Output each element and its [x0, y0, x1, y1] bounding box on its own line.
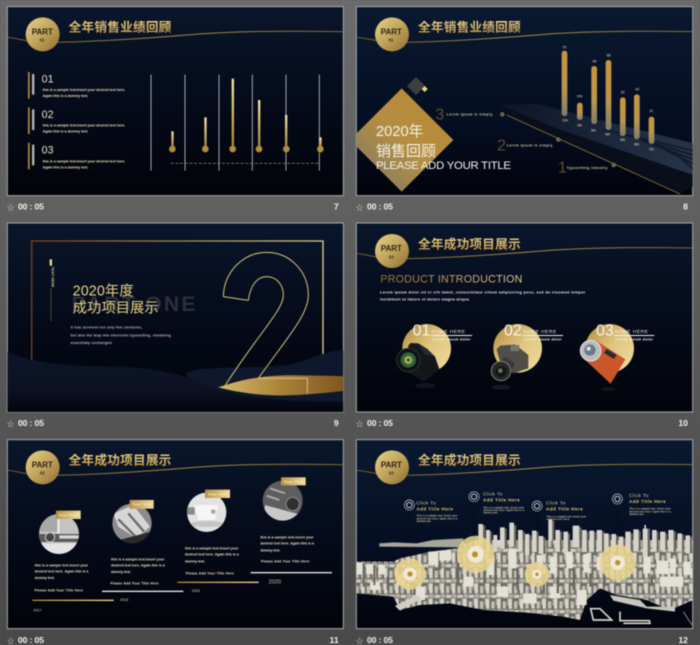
- slide 8 bar chart: 32: [621, 90, 625, 94]
- slide 10 footer: [356, 418, 688, 429]
- panel: slide 11 project timeline: [7, 440, 343, 645]
- slide 10 product 03: Lorem Ipsum dolor: [615, 338, 654, 342]
- slide 11 milestone 2018: Please Add Your Title Here: [110, 581, 159, 585]
- slide 7 list item 01: [28, 72, 125, 99]
- slide 12 footer: [356, 635, 688, 645]
- slide 8 footer: ☆: [356, 203, 364, 212]
- slide 8 small diamonds: [407, 77, 428, 95]
- slide 8 step labels: 1: [558, 160, 567, 177]
- slide 7 part badge: [26, 17, 60, 51]
- slide 7 list item 03: [28, 143, 125, 169]
- slide 10 footer: ☆: [356, 420, 364, 429]
- slide 8 diamond text: 2020年: [376, 123, 423, 140]
- slide 8 step labels: Lorem Ipsum is simply.: [507, 144, 553, 148]
- slide 12 wave: [357, 464, 693, 475]
- slide 8 diamond text: [376, 123, 511, 172]
- panel: slide 7 sales review: [7, 7, 343, 212]
- icon: orange camera: [580, 340, 625, 391]
- slide 10 product 03: [580, 323, 655, 391]
- slide 9 body text: [71, 326, 171, 345]
- slide 7 footer: 7: [334, 201, 339, 211]
- slide 10 product 01: [397, 323, 473, 388]
- slide 9 footer: [7, 418, 339, 429]
- slide 10 part badge: [375, 234, 409, 268]
- slide 11 milestone 2020 first: [177, 490, 259, 593]
- slide 11 milestone 2020 second: 2020: [269, 579, 281, 585]
- slide 11 milestone 2020 first: Please Add Your Title Here: [186, 572, 234, 576]
- slide 8 step labels: Lorem Ipsum is simply.: [447, 113, 493, 117]
- slide 10 product 01: 01: [413, 323, 431, 340]
- slide 8 frame: [356, 7, 693, 196]
- slide 7 footer: 00 : 05: [18, 201, 44, 211]
- slide 8 footer: 00 : 05: [367, 201, 393, 211]
- slide 12 part badge: [375, 450, 409, 484]
- slide 9 heading: 2020年度: [73, 282, 134, 299]
- slide 11 milestone 2020 second: Your Text: [284, 480, 304, 484]
- slide 7 list item 02: Again this is a dummy text.: [43, 130, 88, 134]
- slide 10 title: 全年成功项目展示: [418, 236, 521, 251]
- slide 7 list item 01: 01: [42, 74, 54, 86]
- slide 7 list item 03: Again this is a dummy text.: [43, 165, 88, 169]
- slide 11 milestone 2020 second: [251, 477, 332, 585]
- slide 10 part badge: PART: [381, 244, 402, 253]
- slide 11 milestone 2017: 2017: [33, 608, 41, 612]
- slide 11 milestone 2017: desired text here. Again this is a: [35, 569, 88, 573]
- slide 12 callout 1: dummy text.: [417, 520, 432, 523]
- slide 12 map marker 1: [394, 558, 426, 590]
- slide 9 heading: [73, 282, 159, 316]
- slide 12 callout 2: Add Title Here: [483, 498, 520, 503]
- slide 10 product 02: Lorem Ipsum dolor: [524, 338, 562, 342]
- slide 8 bar chart: 56: [607, 54, 611, 58]
- slide 10 intro text: incididunt ut labore et dolore magna aliqua.: [380, 297, 470, 301]
- slide 10 product 01: NAME HERE: [432, 329, 466, 335]
- slide 7 frame: [7, 7, 343, 196]
- slide 11 milestone 2020 first: desired text here. Again this is a: [185, 553, 239, 557]
- slide 8 bar chart: 6th: [634, 142, 639, 146]
- slide 8 bar chart: [562, 46, 654, 152]
- slide 7 list item 03: 03: [42, 145, 54, 157]
- slide 12 callout 3: [532, 500, 586, 530]
- slide 10 wave: [357, 248, 693, 259]
- slide 8 diamond panel: [350, 88, 453, 192]
- slide 9 hills: [7, 350, 343, 412]
- slide 8 bar chart: 42: [635, 87, 639, 91]
- slide 8 bar chart: 3th: [591, 128, 596, 132]
- slide 12 callout 3: desired text here.: [547, 518, 570, 521]
- icon: black camera: [397, 343, 439, 388]
- slide 12 callout 4: Add Title Here: [629, 499, 666, 504]
- slide 7 part badge: PART: [32, 28, 53, 37]
- slide 10 subtitle: PRODUCT INTRODUCTION: [380, 273, 522, 285]
- slide 9 faint PART ONE: PART ONE: [72, 292, 196, 316]
- slide 10 product 01: Lorem Ipsum dolor: [433, 338, 471, 342]
- slide 9 heading: 成功项目展示: [73, 299, 159, 316]
- slide 8 title: 全年销售业绩回顾: [418, 20, 521, 35]
- slide 10 intro text: Lorem ipsum dolor sit er elit lamet, consectetaur cillum adipisicing pecu, sed do eiusmod tempor: [380, 290, 586, 294]
- slide 11 frame: [7, 440, 343, 629]
- slide 8 bar chart: 5th: [620, 138, 625, 142]
- slide 11 milestone 2018: [102, 500, 183, 602]
- slide 12 3D city: [357, 519, 693, 625]
- slide 7 part badge: 01: [40, 38, 45, 43]
- slide 12 callout 1: [404, 500, 458, 540]
- slide 7 footer: [7, 201, 339, 212]
- slide 8 bar chart: 10h: [562, 118, 568, 122]
- panel: slide 10 product introduction: [356, 223, 693, 429]
- slide 12 map marker 4: [600, 545, 636, 581]
- slide 12 callout 2: dummy text.: [483, 512, 498, 515]
- slide 12 map marker 3: [525, 562, 549, 587]
- slide 8 part badge: 01: [389, 38, 394, 43]
- slide 11 footer: 11: [330, 635, 339, 645]
- slide 8 step labels: [435, 107, 615, 177]
- slide 7 header wave: [8, 31, 343, 42]
- slide 10 product 02: 02: [504, 323, 522, 340]
- slide 11 milestone 2020 first: Your Text: [208, 492, 228, 496]
- slide 11 milestone 2020 second: Please Add Your Title Here: [261, 560, 309, 564]
- slide 7 lollipop chart: [151, 75, 324, 171]
- slide 11 title: 全年成功项目展示: [69, 453, 172, 468]
- slide 12 callout 4: desired text here. Again this is a: [629, 510, 671, 513]
- slide 8 step labels: Typesetting industry.: [567, 166, 608, 170]
- slide 9 footer: 00 : 05: [18, 418, 44, 428]
- slide 12 part badge: 02: [389, 471, 394, 476]
- panel: slide 12 city map: [356, 440, 693, 645]
- slide 8 bar chart: 4th: [605, 133, 610, 137]
- slide 8 part badge: [375, 17, 409, 51]
- slide 12 callout 1: Add Title Here: [416, 507, 453, 512]
- slide 12 callout 2: [469, 491, 525, 537]
- slide 12 callout 4: dummy text.: [629, 513, 644, 516]
- slide 7 list item 01: this is a sample text.Insert your desired text here.: [43, 88, 125, 92]
- slide 9 vertical tag: TEXT HERE: [51, 267, 55, 288]
- slide 8 footer: [356, 201, 688, 212]
- slide 11 milestone 2020 second: desired text here. Again this is a: [260, 541, 314, 545]
- slide 12 footer: 12: [678, 635, 688, 645]
- slide 9 gold outline rectangle: [32, 241, 323, 362]
- slide 12 callout 3: Add Title Here: [546, 507, 583, 512]
- slide 7 list item 01: Again this is a dummy text.: [43, 94, 88, 98]
- slide 12 callout 1: Click To: [416, 500, 436, 505]
- slide 11 part badge: 02: [40, 471, 45, 476]
- slide 11 milestone 2020 first: this is a sample text.Insert your: [185, 547, 239, 551]
- slide 12 callout 1: desired text here. Again this is a: [417, 517, 458, 520]
- slide 12 map marker 2: [457, 536, 494, 573]
- slide 11 milestone 2018: dummy text.: [111, 570, 131, 574]
- slide 12 callout 1: This is a sample text. Insert your: [417, 515, 457, 518]
- slide 10 product 03: NAME HERE: [615, 329, 649, 335]
- slide 8 bar chart: 2th: [577, 124, 582, 128]
- slide 11 milestone 2020 second: dummy text.: [260, 548, 280, 552]
- slide 7 footer: ☆: [7, 203, 15, 212]
- slide 9 gold wedge: [218, 375, 344, 395]
- slide 12 callout 2: This is a sample text. Insert your: [483, 506, 524, 509]
- slide 11 milestone 2017: [32, 511, 114, 612]
- slide 9 footer: ☆: [7, 420, 15, 429]
- slide 8 step labels: 3: [435, 107, 444, 124]
- slide 11 wave: [8, 464, 343, 475]
- slide 7 list item 03: this is a sample text.Insert your desired text here.: [43, 159, 125, 163]
- slide 8 bar chart: 45: [592, 60, 596, 64]
- slide 8 bar chart: 7th: [649, 148, 654, 152]
- slide 7 title: 全年销售业绩回顾: [69, 20, 172, 35]
- slide 11 milestone 2018: this is a sample text.Insert your: [111, 557, 165, 561]
- slide 8 diamond text: PLEASE ADD YOUR TITLE: [376, 160, 511, 172]
- slide 10 frame: [356, 223, 693, 412]
- slide 10 footer: 10: [678, 418, 688, 428]
- slide 8 bar chart: 75: [562, 46, 566, 50]
- slide 12 part badge: PART: [381, 460, 402, 469]
- slide 9 vertical tag: [50, 259, 55, 321]
- slide 11 milestone 2020 first: 2020: [192, 589, 200, 593]
- slide 12 callout 2: desired text here. Again this is a: [483, 509, 525, 512]
- slide 9 body text: but also the leap into electronic typesetting, remaining: [71, 333, 171, 337]
- slide 8 wooden deck: [500, 104, 693, 194]
- slide 9 numeral 2 outline: [223, 252, 308, 393]
- slide 11 milestone 2020 first: dummy text.: [185, 560, 205, 564]
- slide 12 callout 4: This is a sample text. Insert your: [629, 508, 671, 511]
- slide 12 callout 2: Click To: [483, 491, 503, 496]
- slide 11 milestone 2018: 2018: [120, 598, 128, 602]
- slide 10 footer: 00 : 05: [367, 418, 393, 428]
- slide 10 intro text: [380, 290, 586, 301]
- slide 12 footer: 00 : 05: [367, 635, 393, 645]
- slide 8 diamond text: 销售回顾: [376, 143, 436, 160]
- panel: slide 9 section cover: [7, 223, 344, 429]
- slide 11 milestone 2017: Your Text: [58, 513, 78, 517]
- slide 7 list item 02: [28, 107, 125, 134]
- slide 12 title: 全年成功项目展示: [418, 453, 521, 468]
- slide 11 milestone 2017: Please Add Your Title Here: [35, 589, 83, 593]
- slide 9 body text: It has survived not only five centuries,: [71, 326, 142, 330]
- slide 11 milestone 2018: Your Text: [132, 503, 152, 507]
- slide 12 callout 4: Click To: [629, 493, 649, 498]
- slide 7 list item 02: this is a sample text.Insert your desired text here.: [43, 124, 125, 128]
- slide 12 callout 3: This is a sample text. Insert your: [547, 515, 586, 518]
- slide 9 body text: essentially unchanged.: [71, 341, 113, 345]
- slide 10 product 02: [491, 323, 564, 390]
- slide 11 part badge: PART: [32, 460, 53, 469]
- slide 11 milestone 2017: dummy text.: [35, 576, 55, 580]
- slide 10 part badge: 02: [389, 254, 394, 259]
- slide 8 part badge: PART: [381, 28, 402, 37]
- slide 8 bar chart: 11: [649, 109, 653, 113]
- slide 10 product 03: 03: [596, 323, 614, 340]
- slide 11 footer: 00 : 05: [18, 635, 44, 645]
- slide 12 frame: [356, 440, 693, 629]
- slide 11 part badge: [26, 450, 60, 484]
- slide 8 bar chart: 9%: [577, 95, 583, 99]
- slide 8 wave: [357, 31, 693, 42]
- slide 12 callout 3: Click To: [546, 500, 566, 505]
- slide 8 step labels: 2: [497, 137, 506, 154]
- slide 10 product 02: NAME HERE: [523, 329, 557, 335]
- slide 9 frame: [7, 223, 343, 412]
- slide 9 footer: 9: [334, 418, 339, 428]
- slide 11 footer: [7, 635, 339, 645]
- slide 12 callout 4: [612, 493, 671, 530]
- slide 7 list item 02: 02: [42, 109, 54, 121]
- icon: grey camera: [491, 344, 528, 390]
- slide 11 milestone 2020 second: this is a sample text.Insert your: [260, 535, 314, 539]
- slide 11 milestone 2017: this is a sample text.Insert your: [35, 563, 89, 567]
- slide 8 footer: 8: [683, 201, 688, 211]
- slide 11 milestone 2018: desired text here. Again this is a: [111, 563, 165, 567]
- panel: slide 8 sales review chart: [350, 7, 693, 212]
